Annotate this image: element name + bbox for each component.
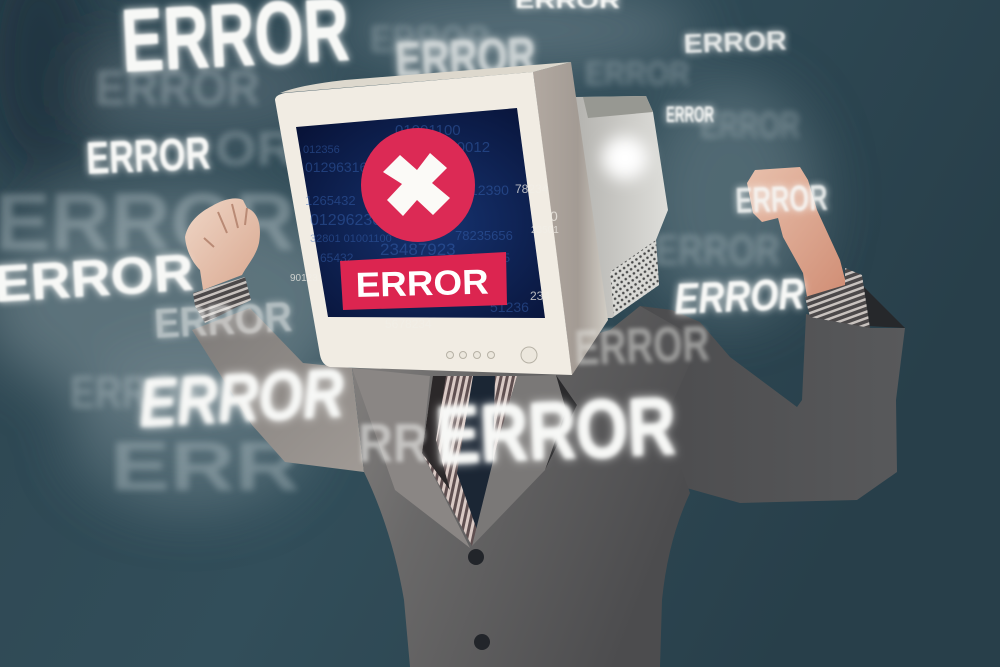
jacket lapels	[352, 368, 470, 548]
monitor buttons	[446, 347, 537, 363]
white digits around the screen: 78234	[515, 182, 549, 196]
word: left upper: ERROR	[85, 128, 211, 184]
screen digits: 012356	[303, 144, 340, 156]
screen digits: 12390	[470, 182, 509, 198]
blurred error words: ERROR	[0, 177, 295, 268]
back housing top strip	[583, 96, 653, 118]
monitor back housing	[575, 96, 668, 318]
right cuff	[805, 268, 870, 328]
screen digits: 51236	[490, 299, 529, 315]
screen digits: 01296316	[305, 159, 368, 175]
blurred error words: ERROR	[95, 60, 260, 116]
screen digits: 23487923	[380, 240, 456, 259]
monitor	[275, 62, 668, 375]
screen digits: 01296230	[310, 212, 381, 229]
man in suit	[185, 167, 905, 667]
screen digits: 32801 01001100	[310, 233, 392, 245]
word: top center: ERROR	[394, 27, 536, 88]
word: faded on left torso: RR	[358, 412, 428, 474]
monitor side	[533, 62, 608, 375]
word: right italic: ERROR	[673, 269, 805, 324]
right arm sleeve	[640, 306, 905, 503]
white digits around the screen: 234	[530, 289, 550, 303]
left fist	[185, 198, 260, 290]
lapel shadow	[545, 375, 577, 470]
white x	[383, 153, 450, 216]
glowing error words over the man	[0, 0, 828, 482]
screen digits: 1265432	[305, 193, 356, 208]
blurred error words: ERROR	[585, 55, 690, 93]
monitor front bezel	[275, 72, 572, 375]
faded word over monitor base: ERROR	[573, 315, 710, 376]
white digits around the screen	[290, 182, 559, 331]
word: over fist: ERROR	[735, 177, 828, 221]
screen digits: 01001100	[395, 122, 461, 139]
error banner: ERROR	[355, 263, 489, 305]
word: over suit: ERROR	[434, 379, 678, 482]
right sleeve opening	[845, 268, 905, 328]
screen digits	[303, 122, 529, 315]
monitor top	[280, 62, 571, 93]
blurred error words: ERROR	[70, 366, 205, 418]
left cuff	[193, 277, 251, 323]
screen digits: 65432	[320, 251, 354, 265]
blurred error words: ERROR	[700, 105, 800, 147]
screen digits: 012345	[470, 251, 510, 265]
white digits around the screen: 23501	[531, 225, 559, 236]
back housing highlight	[602, 136, 648, 180]
word: top right: ERROR	[683, 25, 787, 59]
error banner	[340, 252, 507, 310]
blurred error words: OR	[215, 123, 295, 176]
right forearm and fist	[747, 167, 847, 297]
hazy light patches on the wall	[0, 0, 820, 510]
left arm sleeve	[192, 308, 364, 472]
screen	[296, 108, 545, 318]
word: small right: ERROR	[666, 102, 714, 127]
red circle	[361, 128, 475, 242]
torso	[352, 306, 700, 667]
blurred error words	[0, 19, 800, 505]
screen digits: 000012	[440, 139, 490, 156]
word: left faded: ERROR	[153, 293, 293, 347]
white digits around the screen: 5678234	[385, 317, 432, 331]
jacket buttons	[468, 549, 490, 650]
blurred error words: ERROR	[655, 226, 780, 275]
blurred error words: ERR	[110, 427, 300, 505]
white digits around the screen: 0	[550, 208, 558, 224]
word: italic over arm: ERROR	[137, 354, 346, 442]
white digits around the screen: 90123	[290, 273, 318, 284]
monitor vent	[610, 240, 659, 316]
blurred error words: ERROR	[370, 19, 490, 61]
screen digits: 78235656	[455, 228, 513, 243]
shirt and tie	[422, 376, 517, 546]
